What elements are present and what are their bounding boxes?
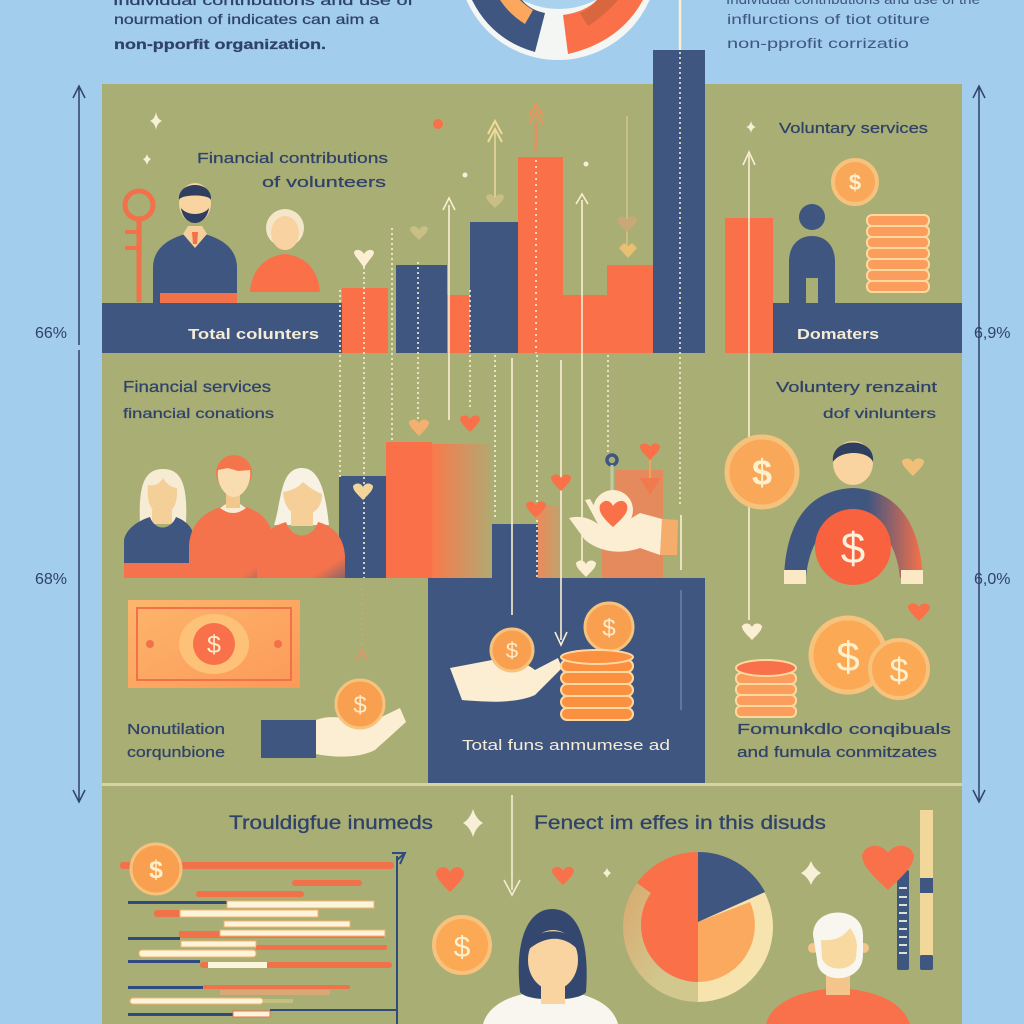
navy total funds block bbox=[428, 578, 705, 783]
icon: hand holding heart bbox=[569, 455, 678, 555]
icon: hand holding coins in navy block: $ bbox=[602, 615, 616, 642]
top left intro text bbox=[113, 0, 413, 52]
heading: voluntary recruitment: Voluntery renzaint bbox=[776, 379, 938, 396]
heading: voluntary services: Voluntary services bbox=[779, 121, 928, 137]
right vertical axis arrow bbox=[973, 86, 985, 802]
figure: woman with dark hair bbox=[483, 909, 618, 1024]
icon: hand holding coins in navy block bbox=[450, 603, 633, 720]
text: formula contributions: and fumula conmitzates bbox=[737, 744, 937, 761]
axis percentage labels: 6,9% bbox=[974, 325, 1010, 342]
figure: older woman bbox=[250, 209, 320, 292]
horizontal gantt chart: $ bbox=[149, 856, 163, 884]
label: total funds: Total funs anmumese ad bbox=[462, 738, 670, 754]
decorative hearts bbox=[353, 194, 930, 640]
top right intro text: non-pprofit corrizatio bbox=[727, 36, 909, 51]
person: man with coral hair in centre bbox=[189, 455, 275, 578]
icon: hand offering coin: $ bbox=[353, 692, 367, 719]
icon: coin near person: $ bbox=[454, 931, 471, 964]
figure: navy person silhouette bbox=[789, 204, 835, 303]
heading: financial contributions of volunteers: of volunteers bbox=[262, 174, 386, 191]
icon: coin stack with coins bbox=[736, 618, 928, 717]
icon: coin stack with coins: $ bbox=[890, 652, 909, 690]
icon: coin held on chest figure bbox=[784, 441, 923, 585]
horizontal gantt chart bbox=[120, 844, 405, 1024]
icon: large heart bbox=[862, 846, 914, 890]
icon: coin: $ bbox=[849, 170, 861, 195]
icon: large coin bbox=[727, 437, 797, 507]
icon: coin bbox=[833, 160, 877, 204]
text: formula contributions bbox=[737, 721, 951, 761]
icon: key or magnifier bbox=[125, 191, 153, 302]
upper bar chart bbox=[102, 50, 962, 353]
top left intro text: nourmation of indicates can aim a bbox=[114, 11, 379, 27]
person: woman with white hair on right bbox=[257, 468, 345, 578]
top right intro text bbox=[726, 0, 980, 51]
icon: coin near person bbox=[434, 917, 490, 973]
heading: financial contributions of volunteers: Financial contributions bbox=[197, 150, 388, 167]
left vertical axis arrow bbox=[73, 86, 85, 802]
icon: pencil bbox=[897, 810, 933, 970]
icon: hand holding coins in navy block: $ bbox=[506, 638, 518, 663]
heading: financial services bbox=[123, 379, 274, 421]
icon: coin held on chest figure: $ bbox=[841, 524, 865, 573]
sparkle accents bbox=[143, 112, 821, 885]
text: nonutilisation contributions bbox=[127, 721, 225, 761]
icon: large coin: $ bbox=[752, 452, 772, 493]
lower bar chart bbox=[339, 442, 663, 578]
pie chart bbox=[623, 852, 773, 1002]
icon: banknote bbox=[128, 600, 300, 688]
figure: man in navy suit bbox=[153, 183, 237, 303]
divider line bbox=[102, 783, 962, 786]
figures: group of three people bbox=[124, 455, 345, 578]
heading: effects: Fenect im effes in this disuds bbox=[534, 813, 826, 834]
person: woman with pale hair on left bbox=[124, 469, 193, 578]
heading: total funds involved: Trouldigfue inumeds bbox=[229, 813, 433, 834]
top donut chart bbox=[458, 0, 658, 60]
icon: small heart bbox=[552, 867, 574, 885]
heading: voluntary recruitment: dof vinlunters bbox=[823, 405, 936, 421]
heading: financial services: Financial services bbox=[123, 379, 271, 396]
top right intro text: influrctions of tiot otiture bbox=[727, 12, 930, 27]
band label: total volunteers: Total colunters bbox=[188, 326, 319, 343]
band label: donators: Domaters bbox=[797, 326, 879, 343]
icon: banknote: $ bbox=[207, 631, 221, 659]
axis percentage labels: 68% bbox=[35, 571, 67, 588]
text: nonutilisation contributions: Nonutilation bbox=[127, 721, 225, 738]
text: formula contributions: Fomunkdlo conqibuals bbox=[737, 721, 951, 738]
figure: older man with beard bbox=[766, 912, 910, 1024]
top left intro text: non-pporfit organization. bbox=[114, 36, 326, 52]
heading: financial services: financial conations bbox=[123, 405, 274, 421]
axis percentage labels: 66% bbox=[35, 325, 67, 342]
heading: voluntary recruitment bbox=[776, 379, 938, 421]
icon: coin stack bbox=[867, 215, 929, 292]
main olive panel bbox=[102, 84, 962, 1024]
dotted connector arrows bbox=[340, 0, 755, 895]
axis percentage labels bbox=[35, 325, 1010, 588]
icon: coin stack with coins: $ bbox=[836, 633, 860, 680]
text: nonutilisation contributions: corqunbione bbox=[127, 744, 225, 761]
icon: heart bbox=[436, 867, 464, 892]
heading: financial contributions of volunteers bbox=[197, 150, 388, 191]
icon: hand offering coin bbox=[261, 680, 406, 758]
axis percentage labels: 6,0% bbox=[974, 571, 1010, 588]
